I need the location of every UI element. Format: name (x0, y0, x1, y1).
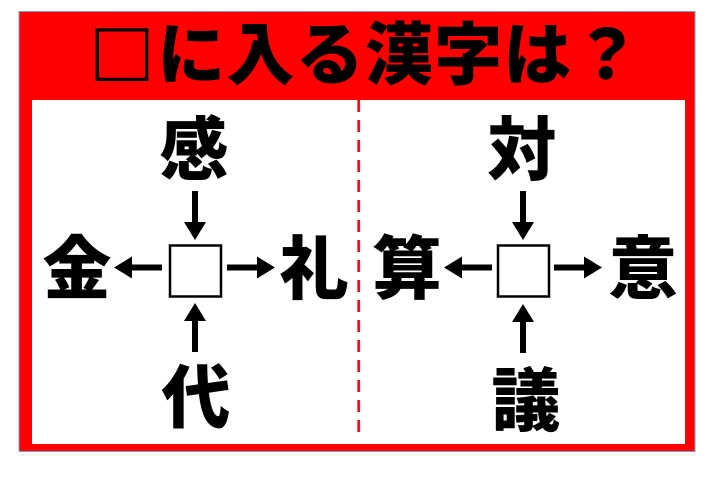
arrow: up (184, 303, 206, 352)
kanji bottom: 議 (492, 363, 560, 440)
arrow: down (512, 191, 534, 240)
title: □ (95, 1, 149, 100)
arrow: left (114, 256, 162, 278)
arrow: right (554, 256, 602, 278)
kanji top: 感 (160, 112, 228, 189)
kanji bottom: 代 (162, 360, 230, 437)
arrow: up (512, 304, 534, 353)
answer box (498, 246, 549, 296)
title (95, 1, 642, 100)
kanji left: 算 (372, 231, 442, 308)
arrow: left (444, 256, 492, 278)
kanji right: 意 (608, 231, 678, 308)
arrow: right (227, 256, 275, 278)
dashed divider (357, 100, 360, 438)
white panel (32, 100, 685, 444)
kanji left: 金 (42, 231, 112, 308)
puzzle: right (372, 112, 678, 440)
arrow: down (184, 191, 206, 240)
title: に入る漢字は？ (157, 18, 642, 94)
kanji top: 対 (488, 112, 556, 189)
answer box (170, 246, 221, 296)
puzzle: left (42, 112, 348, 437)
kanji right: 礼 (280, 231, 348, 308)
